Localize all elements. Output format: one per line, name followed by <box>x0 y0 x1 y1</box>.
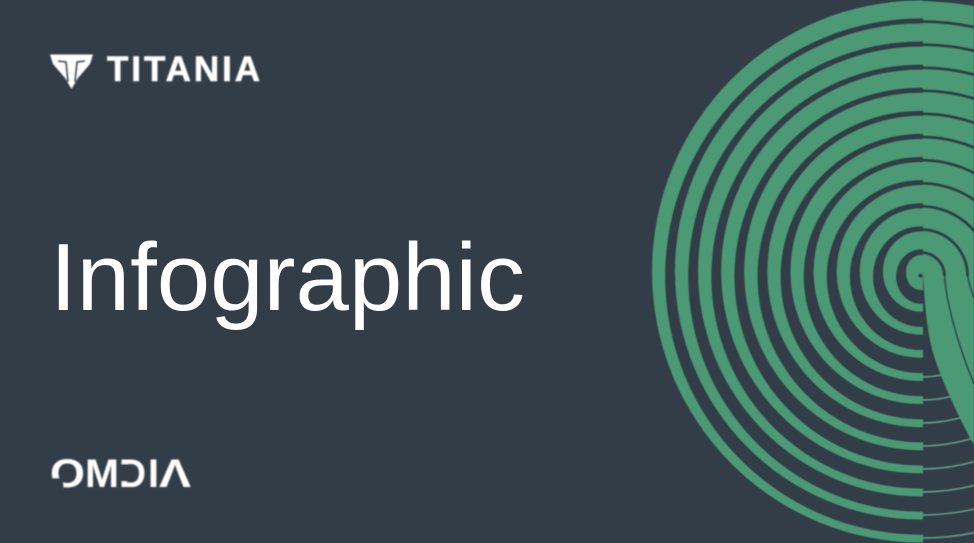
logo: Titania <box>50 50 260 89</box>
icon: Titania mark <box>50 54 93 89</box>
green tail and upper-right fill <box>923 1 974 445</box>
concentric ring graphic <box>652 0 974 542</box>
wordmark letter D: D <box>119 452 146 496</box>
left half of rings <box>652 0 924 543</box>
logo: Omdia <box>48 452 191 496</box>
wordmark: TITANIA: TITANIA <box>107 50 260 89</box>
tail inner lines <box>944 275 974 384</box>
thin lower-right ring lines <box>922 374 974 540</box>
gap in letter O <box>48 478 64 490</box>
wordmark letter O: O <box>50 452 85 496</box>
centre dot <box>918 274 923 278</box>
wordmark letter M: M <box>85 452 119 496</box>
wordmark letter A: Λ <box>159 452 191 496</box>
wordmark letter I: I <box>148 452 159 496</box>
upper-right thin gaps <box>922 20 974 277</box>
title: Infographic <box>50 224 525 331</box>
open stem of letter D <box>119 464 129 482</box>
